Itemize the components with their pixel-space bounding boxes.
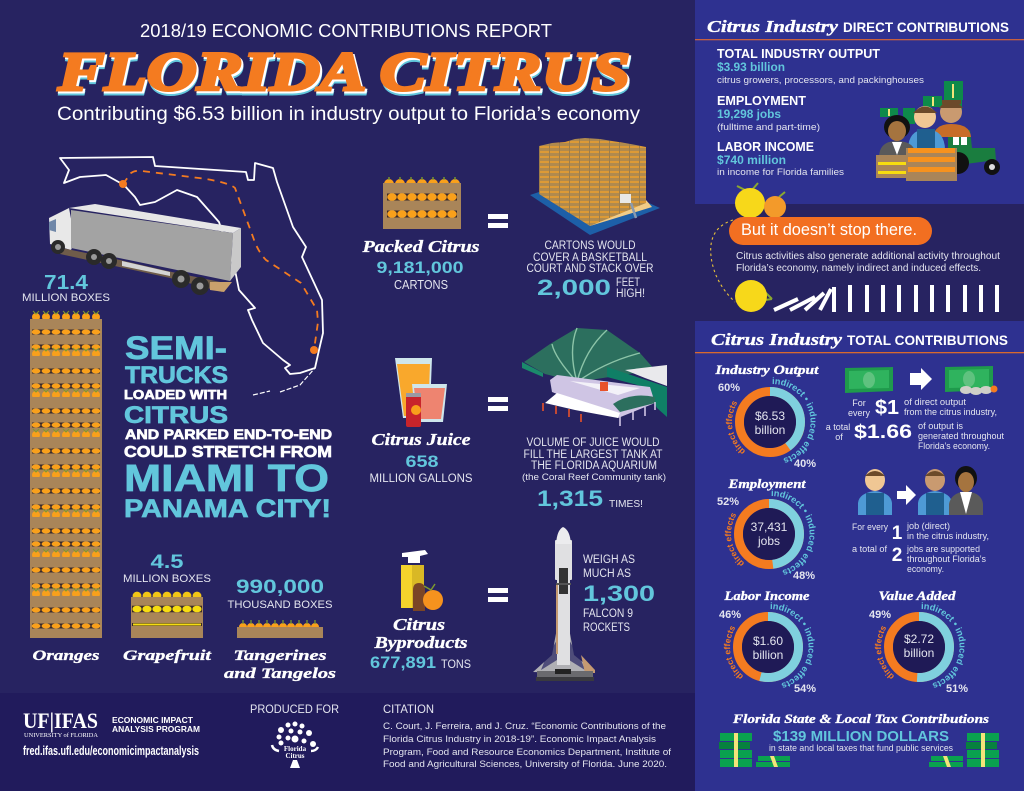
produced for label: PRODUCED FOR (250, 704, 339, 716)
oranges count: 71.4 (44, 272, 89, 294)
heading: direct contributions (695, 17, 1024, 40)
label: oranges: Oranges (32, 648, 100, 664)
panel: packed citrus (361, 138, 660, 300)
icon: grapefruit and orange (735, 183, 786, 218)
equals sign (488, 397, 508, 411)
chart: value added donut: 49% (869, 609, 891, 621)
icon: workers, tractor, crates and money (876, 81, 1000, 181)
stat: labor income: $740 million (717, 155, 786, 167)
icon: dollar bill multiplier (845, 366, 998, 395)
comparison text: TIMES! (609, 498, 643, 510)
chart: labor income donut (719, 589, 816, 695)
program name: ECONOMIC IMPACT (112, 716, 193, 725)
description (736, 251, 1000, 274)
icon: falling dominoes (774, 285, 997, 312)
tax contributions (719, 712, 999, 767)
text: output multiplier: from the citrus industry, (904, 407, 997, 417)
callout: semi trucks comparison: LOADED WITH (124, 387, 227, 402)
callout: semi trucks comparison: MIAMI TO (124, 458, 329, 500)
heading: direct contributions: Citrus Industry (707, 17, 839, 36)
chart: labor income donut: indirect • induced effects (770, 602, 815, 688)
panel: it doesn't stop there (695, 183, 1024, 321)
chart: employment donut: Employment (727, 477, 806, 491)
chart: industry output donut: direct effects (726, 401, 745, 454)
stat: employment: EMPLOYMENT (717, 94, 806, 108)
citation text: C. Court, J. Ferreira, and J. Cruz. “Economic Contributions of the (383, 721, 666, 732)
website: fred.ifas.ufl.edu/economicimpactanalysis (23, 744, 199, 758)
chart: value added donut: 51% (946, 683, 968, 695)
chart: industry output donut (714, 363, 820, 470)
chart: grapefruit crate (131, 592, 203, 638)
callout: semi trucks comparison: PANAMA CITY! (124, 495, 331, 523)
packed citrus unit: CARTONS (394, 278, 448, 292)
chart: employment donut: 37,431 (751, 520, 788, 534)
byproducts heading: Byproducts (373, 633, 468, 652)
comparison text: ROCKETS (583, 622, 630, 634)
stat: total industry output: citrus growers, processors, and packinghouses (717, 75, 924, 86)
byproducts value: 677,891 (370, 653, 436, 672)
citrus juice unit: MILLION GALLONS (370, 473, 473, 485)
packed citrus heading: Packed Citrus (361, 237, 480, 256)
stat: employment (717, 94, 820, 133)
text: output multiplier: of (835, 432, 843, 442)
chart: industry output donut: billion (755, 423, 785, 437)
program name: ANALYSIS PROGRAM (112, 725, 200, 734)
text: output multiplier: of output is (918, 421, 964, 431)
callout: semi trucks comparison: TRUCKS (125, 362, 228, 389)
icon: juice glasses and can (395, 358, 447, 427)
main title: FLORIDA CITRUS (59, 43, 632, 104)
text: output multiplier: every (848, 408, 870, 418)
chart: employment donut: 52% (717, 496, 739, 508)
comparison text: 2,000 (537, 275, 611, 300)
comparison text (583, 554, 655, 634)
map: Florida outline with route (60, 157, 323, 395)
tax contributions: in state and local taxes that fund public services (769, 743, 953, 754)
label: tangelos: and Tangelos (224, 666, 336, 682)
heading: total contributions (695, 330, 1024, 353)
header (57, 21, 641, 125)
citrus juice heading: Citrus Juice (372, 430, 471, 449)
citrus juice value: 658 (406, 452, 438, 471)
comparison text: FALCON 9 (583, 608, 633, 620)
citation text: Florida Citrus Industry in 2018-19”. Economic Impact Analysis (383, 734, 656, 745)
program name (112, 716, 200, 734)
comparison text: CARTONS WOULD (544, 240, 636, 252)
chart: employment donut: 48% (793, 570, 815, 582)
heading: total contributions: TOTAL CONTRIBUTIONS (847, 332, 1008, 348)
equals sign (488, 588, 508, 602)
chart: value added donut: indirect • induced effects (922, 602, 966, 688)
chart: employment donut (717, 477, 816, 582)
chart: tangerines crate (237, 620, 323, 638)
text: jobs multiplier (852, 521, 989, 574)
label: grapefruit: Grapefruit (123, 648, 212, 664)
chart: labor income donut: 46% (719, 609, 741, 621)
citation heading: CITATION (383, 702, 434, 716)
text: output multiplier (826, 397, 1004, 451)
chart: employment donut: jobs (757, 534, 780, 548)
comparison text: FILL THE LARGEST TANK AT (524, 449, 662, 461)
chart: labor income donut: billion (753, 648, 783, 662)
comparison text: 1,300 (583, 581, 655, 606)
icon: spray bottle and orange (401, 550, 443, 611)
comparison text: COURT AND STACK OVER (526, 263, 654, 275)
text: output multiplier: generated throughout (918, 431, 1004, 441)
route dashed line (123, 171, 318, 350)
chart: employment donut: direct effects (724, 513, 744, 566)
equals sign (488, 214, 508, 228)
text: output multiplier: For (852, 398, 866, 408)
icon: semi truck (49, 204, 241, 295)
panel: direct contributions (695, 17, 1024, 181)
icon: Florida Aquarium (522, 328, 667, 426)
byproducts unit: TONS (441, 657, 471, 671)
citation text: Food and Agricultural Sciences, University of Florida. June 2020. (383, 759, 667, 770)
oranges unit: MILLION BOXES (22, 292, 110, 304)
description: Citrus activities also generate additional activity throughout (736, 251, 1000, 262)
chart: industry output donut: 40% (794, 458, 816, 470)
panel: total contributions (695, 330, 1024, 767)
panel: citrus juice (370, 328, 667, 511)
comparison text: 1,315 (537, 486, 603, 511)
stat: total industry output (717, 47, 924, 86)
panel: citrus byproducts (370, 527, 655, 681)
main title: FLORIDA CITRUS (57, 41, 630, 102)
packed citrus value: 9,181,000 (376, 258, 464, 277)
grapefruit count: 4.5 (150, 552, 184, 573)
citation text (383, 721, 671, 770)
icon: crate of oranges (383, 177, 461, 229)
text: jobs multiplier: 1 (892, 523, 903, 544)
text: jobs multiplier: jobs are supported (906, 544, 980, 554)
main title: FLORIDA CITRUS (59, 45, 632, 106)
text: jobs multiplier: 2 (892, 545, 902, 566)
logo: Florida Citrus tree (272, 722, 318, 768)
chart: value added donut: direct effects (874, 626, 894, 679)
comparison text: THE FLORIDA AQUARIUM (531, 460, 657, 472)
citation text: Program, Food and Resource Economics Department, Institute of (383, 747, 671, 758)
comparison text (526, 240, 654, 300)
chart: value added donut: $2.72 (904, 632, 934, 646)
callout: semi trucks comparison: AND PARKED END-TO-END (125, 426, 332, 442)
callout: semi trucks comparison: COULD STRETCH FROM (124, 444, 332, 461)
callout pill (729, 217, 932, 245)
text: output multiplier: a total (826, 422, 850, 432)
callout: semi trucks comparison: CITRUS (124, 402, 228, 429)
chart: industry output donut: Industry Output (714, 363, 819, 377)
byproducts heading: Citrus (393, 615, 445, 634)
label: tangerines: Tangerines (234, 648, 327, 664)
tax contributions: $139 MILLION DOLLARS (773, 728, 949, 745)
chart: employment donut: indirect • induced effects (772, 489, 816, 575)
callout: semi trucks comparison: SEMI- (125, 330, 227, 366)
icon: jobs multiplier people (858, 466, 983, 515)
stat: labor income: in income for Florida families (717, 167, 844, 178)
chart: value added donut (869, 589, 968, 695)
panel: right side background (695, 0, 1024, 791)
comparison text: MUCH AS (583, 568, 631, 580)
chart: industry output donut: $6.53 (755, 409, 785, 423)
comparison text: (the Coral Reef Community tank) (522, 472, 666, 482)
callout: semi trucks comparison (124, 330, 332, 523)
chart: industry output donut: indirect • induced effects (772, 377, 817, 463)
dotted arc (711, 220, 735, 302)
comparison text (522, 437, 666, 511)
tax contributions: Florida State & Local Tax Contributions (732, 712, 989, 726)
heading: direct contributions: DIRECT CONTRIBUTIONS (843, 19, 1009, 35)
tagline: Contributing $6.53 billion in industry output to Florida’s economy (57, 104, 641, 125)
text: jobs multiplier: a total of (852, 544, 887, 554)
comparison text: VOLUME OF JUICE WOULD (526, 437, 660, 449)
tangerines count: 990,000 (236, 577, 324, 598)
UF IFAS logo: UF|IFAS (23, 708, 98, 733)
stat: total industry output: $3.93 billion (717, 62, 785, 74)
chart: labor income donut: 54% (794, 683, 816, 695)
comparison text: WEIGH AS (583, 554, 635, 566)
description: Florida’s economy, namely indirect and induced effects. (736, 263, 981, 274)
stat: employment: (fulltime and part-time) (717, 122, 820, 133)
icon: money stacks (719, 733, 999, 767)
florida keys (253, 368, 315, 395)
grapefruit unit: MILLION BOXES (123, 573, 211, 585)
text: output multiplier: of direct output (904, 397, 967, 407)
chart: labor income donut: $1.60 (753, 634, 783, 648)
UF IFAS logo: UNIVERSITY of FLORIDA (24, 732, 98, 739)
heading: total contributions: Citrus Industry (711, 330, 843, 349)
stat: total industry output: TOTAL INDUSTRY OUTPUT (717, 47, 880, 61)
report subtitle: 2018/19 ECONOMIC CONTRIBUTIONS REPORT (140, 21, 552, 41)
icon: stacked cartons on basketball court (530, 138, 660, 235)
tangerines unit: THOUSAND BOXES (228, 599, 332, 611)
text: jobs multiplier: throughout Florida’s (907, 554, 986, 564)
stat: employment: 19,298 jobs (717, 109, 781, 121)
icon: rolling fruit (735, 280, 772, 312)
logo: Florida Citrus tree: Florida (284, 745, 307, 753)
comparison text: FEET (616, 277, 640, 289)
chart: oranges crate column (30, 311, 102, 638)
byproducts heading (373, 615, 468, 652)
text: jobs multiplier: For every (852, 522, 888, 532)
text: jobs multiplier: economy. (907, 564, 944, 574)
chart: value added donut: billion (904, 646, 934, 660)
route endpoints (119, 180, 318, 354)
stat: labor income (717, 140, 844, 178)
text: jobs multiplier: job (direct) (906, 521, 950, 531)
text: output multiplier: Florida’s economy. (918, 441, 990, 451)
chart: labor income donut: Labor Income (723, 589, 810, 603)
stat: labor income: LABOR INCOME (717, 140, 814, 154)
comparison text: COVER A BASKETBALL (533, 252, 648, 264)
comparison text: HIGH! (616, 288, 645, 300)
text: jobs multiplier: in the citrus industry, (907, 531, 989, 541)
callout pill: But it doesn’t stop there. (741, 220, 917, 239)
chart: value added donut: Value Added (878, 589, 956, 603)
text: output multiplier: $1 (875, 397, 899, 419)
panel: footer (0, 693, 695, 791)
logo: Florida Citrus tree: Citrus (285, 752, 305, 760)
chart: labor income donut: direct effects (724, 626, 743, 679)
panel: boxes of citrus (22, 272, 336, 682)
icon: Falcon 9 rocket (533, 527, 595, 681)
chart: industry output donut: 60% (718, 382, 740, 394)
text: output multiplier: $1.66 (854, 422, 912, 443)
